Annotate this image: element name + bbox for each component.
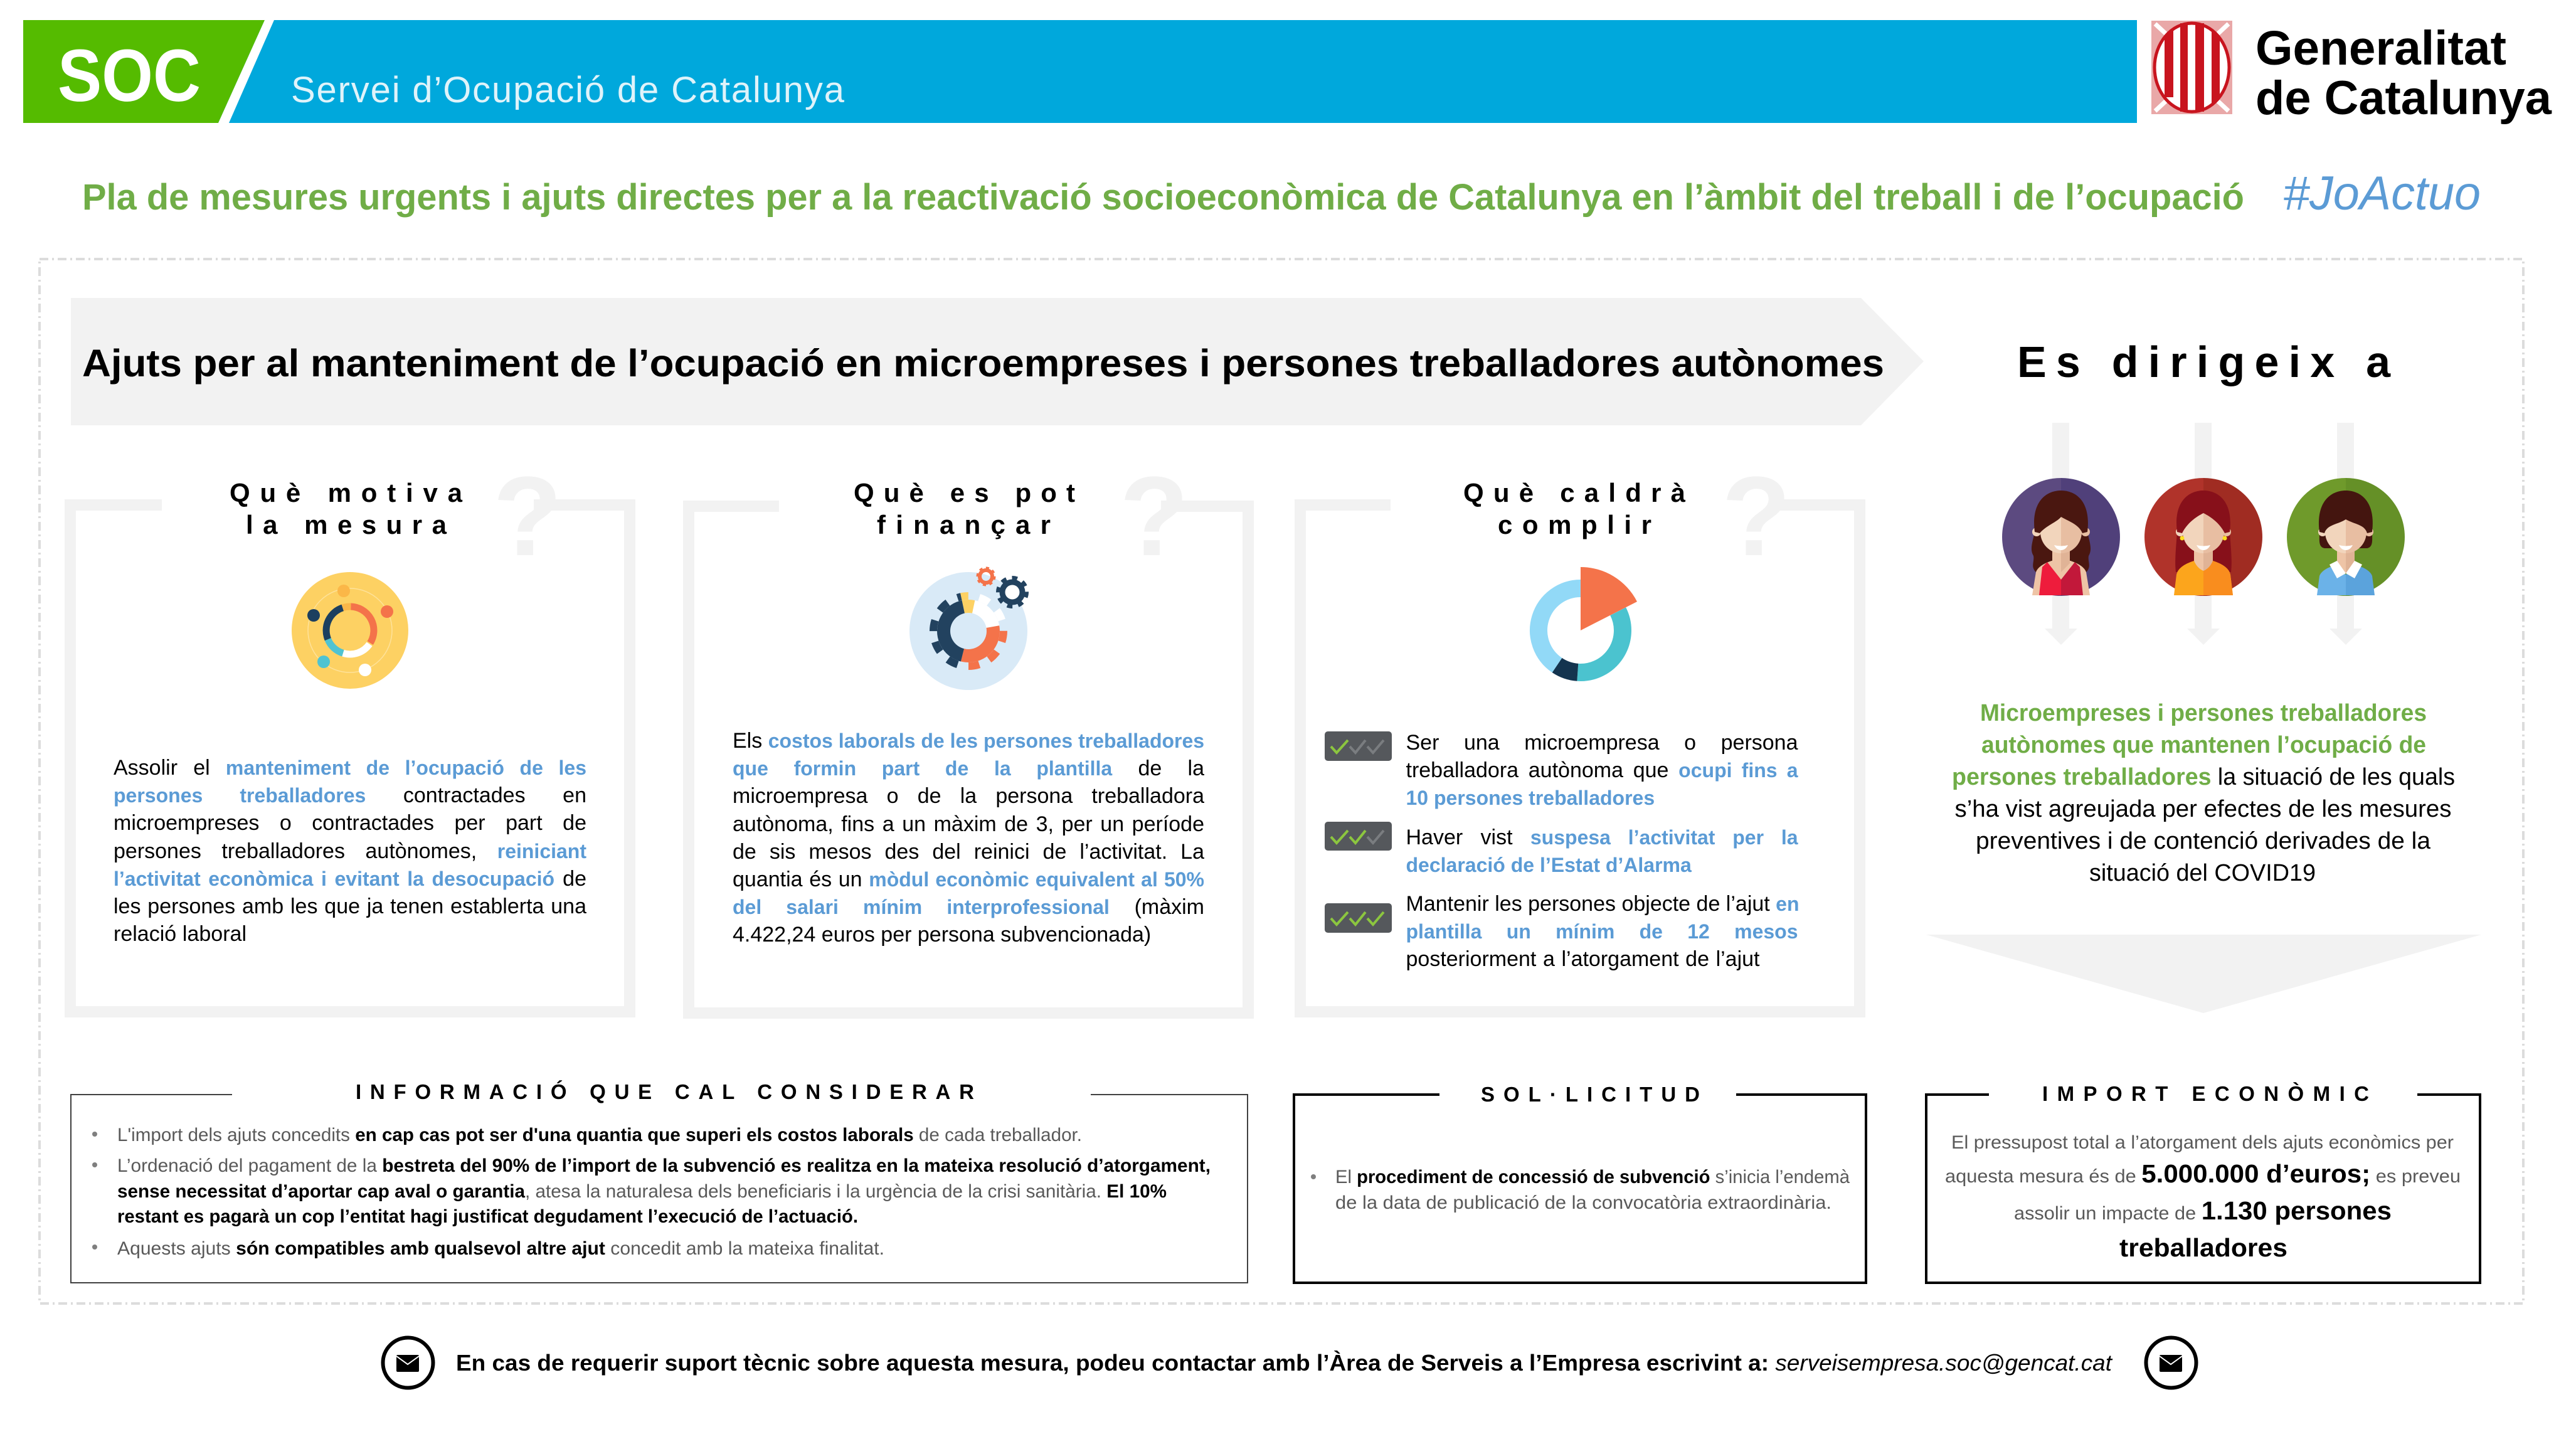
panel: què motiva la mesura: ? xyxy=(493,454,562,580)
icon: woman red xyxy=(2144,478,2262,596)
panel: informació que cal considerar xyxy=(71,1080,1248,1283)
requirement 1: treballadora autònoma que ocupi fins a xyxy=(1406,758,1798,782)
panel heading: complir xyxy=(1498,510,1651,539)
text block: les persones amb les que ja tenen establerta una xyxy=(114,894,586,918)
text block: microempreses o contractades per part de xyxy=(114,811,586,835)
panel heading: la mesura xyxy=(246,510,447,539)
budget text: El pressupost total a l’atorgament dels ajuts econòmics per xyxy=(1951,1132,2454,1153)
icon: donut chart xyxy=(1539,567,1637,672)
budget text: treballadores xyxy=(2119,1233,2287,1262)
text block: quantia és un mòdul econòmic equivalent al 50% xyxy=(733,868,1204,891)
text block: persones treballadores contractades en xyxy=(114,783,586,807)
banner arrow with heading: Ajuts per al manteniment de l’ocupació en microempreses i persones treballadores autònomes xyxy=(82,342,1884,385)
text block: persones treballadores autònomes, reiniciant xyxy=(114,839,586,863)
icon: one check xyxy=(1325,731,1392,761)
text block xyxy=(733,727,1204,955)
icon: woman purple xyxy=(2002,478,2120,596)
requirement 3: posteriorment a l’atorgament de l’ajut xyxy=(1406,947,1760,971)
panel: sol·licitud: SOL·LICITUD xyxy=(1481,1083,1700,1106)
text block: audience: persones treballadores la situació de les quals xyxy=(1952,764,2455,790)
panel: sol·licitud xyxy=(1294,1083,1866,1283)
logo: Generalitat de Catalunya: de Catalunya xyxy=(2255,72,2552,125)
text block: audience: autònomes que mantenen l’ocupació de xyxy=(1981,732,2426,758)
panel heading xyxy=(854,478,1075,539)
text block: l’activitat econòmica i evitant la desocupació de xyxy=(114,867,586,891)
budget text xyxy=(1945,1132,2461,1262)
text block: microempresa o de la persona treballadora xyxy=(733,784,1204,808)
text block: que formin part de la plantilla de la xyxy=(733,756,1204,780)
panel heading xyxy=(230,478,463,539)
panel: què motiva la mesura xyxy=(70,454,630,1012)
panel: què caldrà complir: ? xyxy=(1722,454,1791,580)
panel heading: Què caldrà xyxy=(1463,478,1686,507)
contact line: En cas de requerir suport tècnic sobre aquesta mesura, podeu contactar amb l’Àrea de Serveis a l’Empresa escrivint a: serveisempresa.soc@gencat.cat xyxy=(456,1350,2113,1376)
title: Pla de mesures urgents i ajuts directes per a la reactivació socioeconòmica de Catalunya en l’àmbit del treball i de l’ocupació xyxy=(82,177,2244,218)
requirement 2: Haver vist suspesa l’activitat per la xyxy=(1406,825,1798,849)
icon: three checks xyxy=(1325,903,1392,933)
budget text: aquesta mesura és de 5.000.000 d’euros; es preveu xyxy=(1945,1159,2461,1188)
bullet text xyxy=(1311,1167,1850,1213)
requirement 2 xyxy=(1406,824,1798,880)
panel: què es pot finançar xyxy=(689,454,1248,1013)
bullet list: Aquests ajuts són compatibles amb qualsevol altre ajut concedit amb la mateixa finalitat. xyxy=(117,1238,884,1259)
text block: audience: s’ha vist agreujada per efectes de les mesures xyxy=(1954,796,2451,822)
panel: people the aid is for xyxy=(1926,423,2481,1013)
bullet text: El procediment de concessió de subvenció s’inicia l’endemà xyxy=(1335,1167,1850,1187)
text block: del salari mínim interprofessional (màxim xyxy=(733,895,1204,919)
text block: autònoma, fins a un màxim de 3, per un període xyxy=(733,812,1204,836)
text block: de sis mesos des del reinici de l’activitat. La xyxy=(733,840,1204,864)
organisation name: Servei d’Ocupació de Catalunya xyxy=(291,70,845,110)
icon: mail left xyxy=(383,1337,433,1388)
requirement 1: Ser una microempresa o persona xyxy=(1406,731,1798,755)
text block: relació laboral xyxy=(114,922,246,946)
panel heading xyxy=(1463,478,1686,539)
icon: woman green xyxy=(2287,478,2405,596)
requirement 3: Mantenir les persones objecte de l’ajut en xyxy=(1406,892,1798,916)
logo: Generalitat de Catalunya xyxy=(2151,21,2552,125)
text block: audience: situació del COVID19 xyxy=(2089,860,2316,886)
icon: gears xyxy=(909,568,1027,690)
hashtag: #JoActuo xyxy=(2283,167,2481,220)
text block xyxy=(114,754,586,955)
panel: import econòmic: IMPORT ECONÒMIC xyxy=(2042,1082,2369,1105)
bullet list: L’ordenació del pagament de la bestreta del 90% de l’import de la subvenció es realitza en la mateixa resolució d’atorgament, xyxy=(117,1155,1211,1176)
text block: Assolir el manteniment de l’ocupació de les xyxy=(114,756,586,780)
text block: audience: preventives i de contenció derivades de la xyxy=(1976,828,2431,854)
requirement 3: plantilla un mínim de 12 mesos xyxy=(1406,920,1798,943)
text block: audience xyxy=(1952,700,2455,886)
text block: Els costos laborals de les persones treballadores xyxy=(733,729,1204,753)
text block: audience: Microempreses i persones treballadores xyxy=(1980,700,2427,726)
bullet text: de la data de publicació de la convocatòria extraordinària. xyxy=(1335,1192,1831,1213)
arrow: wide down xyxy=(1926,935,2481,1013)
heading: Es dirigeix a: Es dirigeix a xyxy=(2017,337,2391,386)
bullet list: L'import dels ajuts concedits en cap cas pot ser d'una quantia que superi els costos laborals de cada treballador. xyxy=(117,1125,1082,1145)
bullet list xyxy=(92,1125,1211,1259)
panel heading: Què motiva xyxy=(230,478,463,507)
banner arrow with heading xyxy=(71,298,1924,425)
icon: coat of arms xyxy=(2151,21,2232,114)
panel: import econòmic xyxy=(1926,1082,2480,1283)
budget text: assolir un impacte de 1.130 persones xyxy=(2014,1196,2392,1225)
panel heading: Què es pot xyxy=(854,478,1075,507)
bullet list: restant es pagarà un cop l’entitat hagi justificat degudament l’execució de l’actuació. xyxy=(117,1206,858,1227)
SOC logo text: SOC xyxy=(58,34,201,117)
logo: Generalitat de Catalunya: Generalitat xyxy=(2255,21,2506,75)
icon: two checks xyxy=(1325,822,1392,851)
arrow: down 3 xyxy=(2330,423,2362,645)
arrow: down 1 xyxy=(2045,423,2077,645)
panel heading: finançar xyxy=(877,510,1051,539)
panel: què es pot finançar: ? xyxy=(1120,454,1189,580)
requirement 1 xyxy=(1406,729,1798,813)
requirement 3 xyxy=(1406,890,1798,974)
arrow: down 2 xyxy=(2187,423,2220,645)
panel: què caldrà complir xyxy=(1300,454,1860,1012)
header band xyxy=(23,20,2137,123)
panel: informació que cal considerar: INFORMACIÓ QUE CAL CONSIDERAR xyxy=(356,1080,974,1103)
icon: mail right xyxy=(2146,1337,2197,1388)
bullet list: sense necessitat d’aportar cap aval o garantia, atesa la naturalesa dels beneficiaris i la urgència de la crisi sanitària. El 10% xyxy=(117,1181,1167,1202)
icon: ring with dots xyxy=(292,572,408,689)
requirement 2: declaració de l’Estat d’Alarma xyxy=(1406,854,1692,876)
requirement 1: 10 persones treballadores xyxy=(1406,787,1655,809)
text block: 4.422,24 euros per persona subvencionada) xyxy=(733,923,1151,947)
